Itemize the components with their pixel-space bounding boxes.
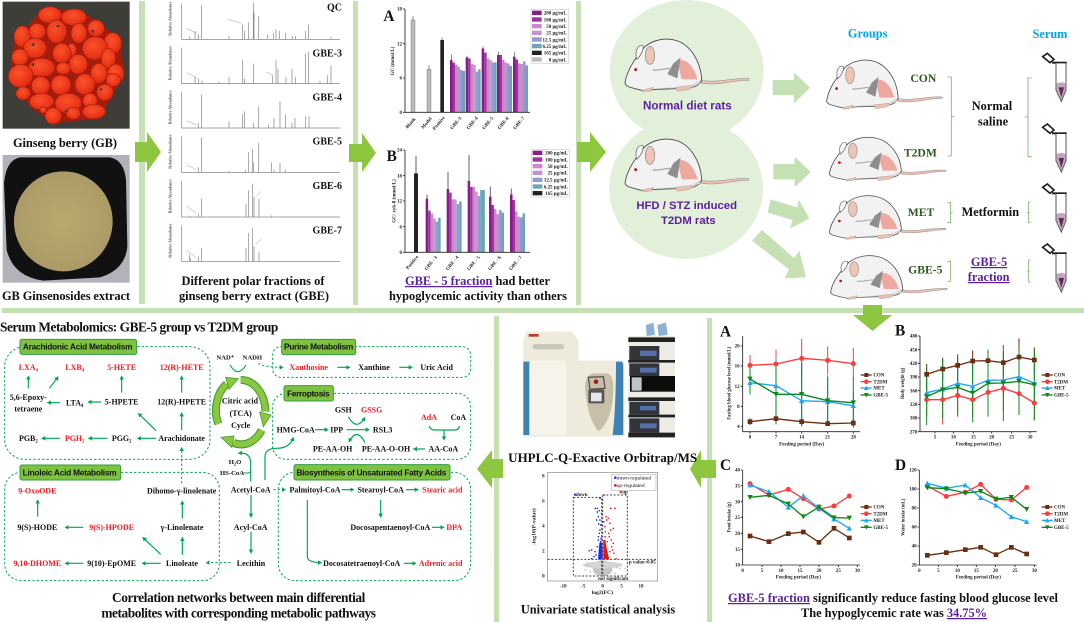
chart B: body weight: 15 [971, 436, 976, 441]
chart A: fasting glucose: Fasting blood glucose level (mmol/L) [728, 346, 733, 420]
chart A: fasting glucose: 14 [799, 436, 805, 441]
group labels: T2DM [904, 146, 937, 159]
panel: bar chart A: 50 μg/mL [546, 25, 567, 30]
panel: bar chart B: 50 μg/mL [548, 165, 569, 170]
pathway: arachidonic acid [5, 339, 210, 459]
treatment labels: GBE-5 [971, 255, 1007, 269]
label: extract: GB Ginsenosides extract [2, 289, 131, 303]
chart D: water intake: 40 [912, 545, 917, 550]
panel: bar chart A: 0 [399, 111, 402, 116]
panel: bar chart B: GC/ xyk-8 (mmol/L) [393, 179, 398, 223]
heading: serum metabolomics: Serum Metabolomics: GBE-5 group vs T2DM group [0, 319, 278, 334]
pathway: arachidonic acid: Arachidonic Acid Metabolism [23, 342, 132, 352]
panel: bar chart A: 6 [399, 77, 402, 82]
pathway: linoleic acid [5, 465, 219, 581]
chart B: body weight: 450 [910, 348, 918, 353]
chromatogram labels [313, 2, 342, 236]
pathway: linoleic acid: γ-Linolenate [160, 523, 204, 532]
chart D: water intake: 0 [918, 569, 921, 574]
NAD/NADH cofactors [216, 354, 283, 372]
chart D: water intake: 25 [1013, 569, 1018, 574]
caption: hypoglycemic rate: GBE-5 fraction significantly reduce fasting blood glucose level [728, 591, 1059, 605]
pathway: fatty acids [278, 465, 471, 581]
pathway: arachidonic acid: 2 [35, 440, 38, 445]
group labels: CON [910, 72, 937, 85]
chart B: body weight: 5 [934, 436, 937, 441]
caption: GBE-5 better activity: GBE - 5 fraction had better [405, 274, 550, 288]
green blob: rat populations [609, 0, 764, 259]
pathway: arachidonic acid: Arachidonate [158, 434, 205, 443]
label: normal diet rats: Normal diet rats [643, 99, 732, 112]
chart B: body weight: 270 [910, 430, 918, 435]
chart A: fasting glucose: 12 [735, 385, 740, 390]
panel: bar chart B: 12 [397, 200, 403, 205]
arrow: animal model to charts [853, 305, 892, 331]
chart D: water intake: GBE-5 [1054, 526, 1069, 531]
chart: volcano plot: down-regulated [617, 475, 651, 481]
pathway: ferroptosis: PE-AA-OH [313, 445, 353, 454]
pathway: arachidonic acid: 4 [81, 404, 84, 409]
pathway: fatty acids: Palmitoyl-CoA [289, 485, 341, 494]
chart C: food intake: 20 [817, 569, 822, 574]
chart: volcano plot: 10 [639, 584, 644, 589]
chromatogram labels: GBE-6 [313, 181, 342, 192]
chart D: water intake: 10 [955, 569, 960, 574]
caption: polar fractions [179, 274, 329, 303]
caption: polar fractions: ginseng berry extract (GBE) [179, 289, 329, 303]
panel: bar chart A [383, 8, 568, 132]
pathway: fatty acids: Docosapentaenoyl-CoA [350, 523, 430, 532]
chromatogram GBE-3: Relative Abundance [167, 46, 172, 80]
chart D: water intake: 5 [937, 569, 940, 574]
pathway: purine: Purine Metabolism [284, 342, 353, 352]
chart A: fasting glucose: 16 [735, 365, 740, 370]
chart: volcano plot: -5 [581, 584, 586, 589]
chart D: water intake: T2DM [1054, 512, 1068, 517]
rat: MET [829, 196, 946, 240]
panel: bar chart A: GBE-6 [497, 116, 511, 131]
pathway: ferroptosis: GSSG [361, 406, 382, 415]
panel: bar chart A: A [383, 8, 394, 25]
chart: volcano plot [530, 473, 658, 596]
label: univariate: Univariate statistical analysis [521, 602, 675, 616]
chart A: fasting glucose: Feeding period (Day) [779, 442, 825, 447]
chart: volcano plot: up-regulated [617, 483, 645, 489]
pathway: ferroptosis: PE-AA-O-OH [362, 445, 411, 454]
pathway: linoleic acid: Linoleate [166, 559, 198, 568]
chart B: body weight: CON [1054, 374, 1065, 379]
panel: bar chart A: 200 μg/mL [544, 12, 567, 17]
caption: correlation networks: metabolites with corresponding metabolic pathways [101, 605, 376, 620]
chart A: fasting glucose: 20 [735, 345, 740, 350]
NAD/NADH cofactors: NAD⁺ [216, 354, 235, 361]
chart C: food intake: 15 [735, 548, 741, 553]
instrument: LC stack [628, 323, 675, 437]
panel: animal model [609, 0, 1068, 300]
panel: bar chart B: 200 μg/mL [545, 152, 569, 157]
chart D: water intake: 100 [909, 488, 917, 493]
chart D: water intake: 120 [909, 469, 917, 474]
label: HFD STZ rats [636, 200, 737, 227]
panel: bar chart A: 12.5 μg/mL [543, 38, 567, 43]
label: ginseng berry: Ginseng berry (GB) [13, 136, 117, 150]
chart B: body weight: B [895, 323, 905, 340]
pathway: arachidonic acid: 4 [82, 369, 85, 374]
chart A: fasting glucose: 28 [851, 436, 856, 441]
pathway: arachidonic acid: 5,6-Epoxy- [10, 393, 47, 402]
chart D: water intake: D [895, 457, 906, 474]
photo: ginsenosides extract powder [3, 155, 130, 283]
chart C: food intake: CON [873, 506, 885, 511]
panel: bar chart B: GBE - 7 [509, 255, 524, 272]
chart: volcano plot: 4 [542, 525, 545, 530]
pathway: arachidonic acid: LXB [65, 363, 82, 372]
panel: UHPLC-MS [508, 323, 697, 616]
chart: volcano plot: -log10(P-value) [530, 508, 537, 545]
panel: bar chart A: 165 μg/mL [544, 52, 567, 57]
pathway: ferroptosis: Ferroptosis [287, 388, 330, 398]
panel: bar chart B: Positive [406, 254, 421, 271]
pathway: linoleic acid: 9(S)-HODE [17, 523, 57, 532]
panel: bar chart A: Blank [405, 117, 417, 130]
chart A: fasting glucose: 8 [737, 405, 740, 410]
arrow: instrument to network [477, 450, 503, 488]
pathway: purine: Xanthosine [289, 363, 328, 372]
chromatogram GBE-5 [167, 134, 340, 172]
pathway: arachidonic acid: PGG [112, 434, 129, 443]
panel: bar chart A: 18 [397, 8, 403, 13]
chart C: food intake: GBE-5 [873, 526, 889, 531]
chart D: water intake: Feeding period (Day) [956, 576, 1001, 581]
brackets [947, 77, 1032, 282]
pathway: linoleic acid: Dihomo-γ-linolenate [147, 486, 217, 495]
chart C: food intake: 35 [735, 484, 741, 489]
chart C: food intake: Feeding period (Day) [776, 576, 821, 581]
chart B: body weight: 10 [951, 436, 956, 441]
chromatogram GBE-5: Relative Abundance [167, 134, 172, 169]
pathway: arachidonic acid: 5-HPETE [105, 398, 139, 407]
chart C: food intake: MET [873, 519, 885, 524]
chart: volcano plot: 0 [601, 584, 604, 589]
chart D: water intake: 30 [1032, 569, 1037, 574]
rat: T2DM [829, 137, 946, 181]
chromatogram labels: GBE-5 [313, 136, 342, 148]
pathway: fatty acids: Adrenic acid [419, 559, 463, 568]
pathway: arachidonic acid: LXA [19, 363, 36, 372]
chart C: food intake: 20 [735, 532, 741, 537]
pathway: linoleic acid: Linoleic Acid Metabolism [23, 467, 117, 477]
TCA cycle: Cycle [231, 421, 251, 430]
pathway: arachidonic acid: 5-HETE [107, 363, 136, 372]
heading: groups: Groups [848, 27, 888, 41]
chromatogram GBE-7: Relative Abundance [167, 223, 172, 258]
panel: bar chart A: 100 μg/mL [544, 18, 567, 23]
arrow: bar charts to animal model [577, 132, 606, 172]
caption: hypoglycemic rate [728, 591, 1059, 620]
pathway: ferroptosis: RSL3 [373, 425, 392, 434]
panel: bar chart B: 0 [399, 251, 402, 256]
panel: bar chart A: GC (mmol/L) [391, 46, 396, 75]
pathway: linoleic acid: 9-OxoODE [18, 486, 56, 495]
pathway: arachidonic acid: 4 [36, 369, 39, 374]
central acetyl-CoA chain [206, 437, 293, 568]
central acetyl-CoA chain: H [229, 459, 234, 466]
panel: bar chart B: 24 [397, 149, 403, 154]
chromatogram GBE-3 [167, 46, 340, 84]
rat: GBE-5 [831, 256, 948, 300]
pathway: fatty acids: Stearic acid [422, 485, 463, 494]
rat: CON [827, 60, 943, 109]
panel: chromatograms [167, 1, 340, 261]
chart B: body weight: 20 [989, 436, 995, 441]
chart B: body weight: 330 [910, 403, 918, 408]
chart A: fasting glucose: GBE-5 [873, 394, 889, 399]
photo: ginseng berries [3, 2, 130, 129]
chromatogram QC [167, 1, 340, 39]
central acetyl-CoA chain: Acetyl-CoA [231, 485, 271, 494]
chart D: water intake [895, 457, 1069, 581]
panel: bar chart B: GBE - 4 [446, 255, 461, 272]
chart B: body weight: 25 [1009, 436, 1015, 441]
arrow: extract to fractions [135, 132, 161, 172]
label: UHPLC: UHPLC-Q-Exactive Orbitrap/MS [508, 450, 697, 465]
treatment labels: saline [978, 114, 1009, 128]
chart: volcano plot: 6 [542, 500, 545, 505]
chromatogram labels: GBE-7 [313, 226, 342, 236]
chart D: water intake: MET [1054, 519, 1066, 524]
chart: volcano plot: -10 [560, 584, 567, 589]
chart B: body weight: Feeding period (Day) [956, 442, 1001, 447]
treatment labels: fraction [968, 270, 1010, 284]
chart C: food intake: C [720, 457, 731, 474]
chart B: body weight: Body weight (g) [901, 367, 906, 399]
pathway: arachidonic acid: tetraene [14, 405, 43, 414]
panel: bar chart B: 6.25 μg/mL [544, 185, 569, 190]
label: HFD STZ rats: HFD / STZ induced [636, 200, 737, 212]
pathway: ferroptosis [273, 386, 471, 459]
pathway: linoleic acid: 9(10)-EpOME [87, 559, 136, 568]
caption: correlation networks: Correlation networks between main differential [112, 590, 366, 605]
tubes: serum samples [1043, 53, 1067, 292]
arrow: charts to instrument [690, 450, 716, 488]
chart: volcano plot: log2(FC) [592, 589, 613, 596]
panel: bar chart A: GBE-4 [466, 116, 480, 131]
chart: volcano plot: 2 [542, 549, 545, 554]
TCA cycle: Citric acid [222, 397, 259, 406]
rat: normal diet [625, 39, 749, 92]
caption: GBE-5 better activity: hypoglycemic activity than others [389, 289, 567, 303]
pathway: ferroptosis: GSH [335, 406, 353, 415]
group labels: GBE-5 [908, 263, 943, 276]
chart A: fasting glucose: 0 [749, 436, 752, 441]
panel: bar chart A: 0 μg/mL [549, 58, 567, 63]
pathway: fatty acids: DPA [446, 523, 462, 532]
chart: volcano plot: p value=0.05 [629, 560, 656, 565]
rat: HFD/STZ [625, 139, 749, 192]
chromatogram QC: Relative Abundance [167, 1, 172, 36]
chart C: food intake: 15 [798, 569, 803, 574]
NAD/NADH cofactors: NADH [243, 354, 263, 361]
chart C: food intake: 30 [735, 500, 741, 505]
pathway: fatty acids: Docosatetraenoyl-CoA [323, 559, 400, 568]
chart B: body weight: MET [1054, 387, 1066, 392]
chart C: food intake: 10 [735, 564, 741, 569]
caption: hypoglycemic rate: The hypoglycemic rate was 34.75% [801, 606, 987, 620]
panel: line charts [720, 323, 1069, 581]
chart C: food intake: 40 [735, 469, 741, 474]
chart C: food intake: 25 [735, 516, 741, 521]
chart B: body weight: 300 [910, 417, 918, 422]
treatment labels: Metformin [962, 205, 1019, 219]
chromatogram GBE-6 [167, 179, 340, 217]
chart: volcano plot: 5 [620, 584, 623, 589]
panel: bar chart B: 12.5 μg/mL [544, 179, 569, 184]
chromatogram GBE-4 [167, 90, 340, 128]
pathway: purine [273, 339, 471, 377]
panel: bar chart A: GBE-3 [450, 116, 464, 131]
arrow: fractions to bar charts [349, 133, 376, 172]
central acetyl-CoA chain: Lecithin [237, 559, 266, 568]
chart A: fasting glucose [720, 324, 889, 447]
central acetyl-CoA chain: 2 [234, 461, 236, 466]
panel: metabolic network [0, 319, 471, 620]
chart A: fasting glucose: 7 [775, 436, 778, 441]
chart B: body weight [895, 323, 1069, 447]
chromatogram labels: GBE-3 [313, 48, 342, 60]
pathway: ferroptosis: CoA [451, 413, 466, 422]
panel: bar chart A: 6.25 μg/mL [543, 45, 567, 50]
chart B: body weight: 390 [910, 376, 918, 381]
chromatogram GBE-4: Relative Abundance [167, 90, 172, 124]
chart A: fasting glucose: A [720, 324, 731, 341]
chart B: body weight: 30 [1028, 436, 1033, 441]
panel: bar chart B: 18 [397, 174, 403, 179]
chart: volcano plot: not significant [598, 577, 629, 582]
panel: bar chart A: Positive [432, 115, 447, 132]
heading: serum: Serum [1033, 27, 1068, 41]
chart D: water intake: Water intake (mL) [902, 498, 907, 536]
central acetyl-CoA chain: O [236, 459, 241, 466]
dashed link: dihomo to arachidonate [180, 447, 183, 483]
group labels [904, 72, 943, 276]
chart B: body weight: GBE-5 [1054, 394, 1069, 399]
panel: bar chart A: 12 [397, 42, 403, 47]
chart D: water intake: 60 [912, 526, 917, 531]
central acetyl-CoA chain: Acyl-CoA [234, 523, 268, 532]
pathway: ferroptosis: AdA [421, 413, 437, 422]
panel: bar chart A: Model [421, 116, 434, 130]
chart A: fasting glucose: 21 [825, 436, 831, 441]
pathway: arachidonic acid: PGH [65, 434, 82, 443]
panel: bar chart B: GBE - 6 [488, 255, 503, 272]
chart B: body weight: 420 [910, 362, 918, 367]
chart: volcano plot: up [622, 490, 628, 495]
pathway: arachidonic acid: 2 [129, 440, 132, 445]
treatment labels: Normal [972, 99, 1013, 113]
central acetyl-CoA chain: HS-CoA [220, 470, 244, 477]
chart C: food intake: 5 [761, 569, 764, 574]
pathway: arachidonic acid: 12(R)-HPETE [157, 398, 206, 407]
chart D: water intake: CON [1054, 506, 1065, 511]
chart A: fasting glucose: MET [873, 387, 885, 392]
pathway: arachidonic acid: PGB [19, 434, 35, 443]
chart A: fasting glucose: 4 [737, 425, 740, 430]
pathway: ferroptosis: HMG-CoA [277, 425, 315, 434]
pathway: linoleic acid: 9,10-DHOME [13, 559, 61, 568]
chromatogram labels: GBE-4 [313, 92, 342, 104]
chart C: food intake: T2DM [873, 512, 888, 517]
chart: volcano plot: 8 [542, 475, 545, 480]
chart B: body weight: 480 [910, 335, 918, 340]
pathway: ferroptosis: AA-CoA [428, 445, 458, 454]
chromatogram GBE-6: Relative Abundance [167, 179, 172, 213]
chart D: water intake: 20 [993, 569, 998, 574]
chromatogram labels: QC [327, 2, 342, 14]
pathway: ferroptosis: IPP [330, 425, 343, 434]
panel: bar chart A: GBE-7 [513, 116, 527, 131]
pathway: fatty acids: Stearoyl-CoA [357, 485, 404, 494]
pathway: linoleic acid: 9(S)-HPODE [89, 523, 134, 532]
TCA cycle [216, 377, 271, 447]
panel: bar chart A: 25 μg/mL [546, 32, 567, 37]
chart C: food intake: 10 [779, 569, 784, 574]
panel: bar chart B: GBE - 3 [424, 255, 439, 272]
pathway: arachidonic acid: LTA [66, 398, 81, 407]
panel: bar chart B: GBE - 5 [467, 255, 482, 272]
pathway: purine: Xanthine [358, 363, 390, 372]
caption: polar fractions: Different polar fractions of [182, 274, 325, 288]
panel: bar chart B: B [387, 148, 397, 165]
panel: bar chart B: 25 μg/mL [548, 172, 569, 177]
chromatogram GBE-7 [167, 223, 340, 261]
panel: bar chart A: GBE-5 [482, 116, 496, 131]
pathway: arachidonic acid: 12(R)-HETE [160, 363, 204, 372]
caption: correlation networks [101, 590, 376, 620]
chart B: body weight: T2DM [1054, 380, 1068, 385]
pathway: fatty acids: Biosynthesis of Unsaturated Fatty Acids [296, 467, 447, 477]
label: HFD STZ rats: T2DM rats [661, 215, 716, 227]
chart C: food intake: 0 [741, 569, 744, 574]
chart C: food intake: 30 [855, 569, 860, 574]
chart B: body weight: 360 [910, 389, 918, 394]
TCA cycle: (TCA) [230, 409, 252, 418]
group labels: MET [908, 206, 934, 219]
treatment labels [962, 99, 1019, 284]
instrument: mass spectrometer [523, 332, 623, 437]
panel: bar chart B [387, 148, 569, 272]
chart D: water intake: 80 [912, 507, 917, 512]
chart C: food intake: Food intake (g) [728, 502, 733, 532]
chart: volcano plot: 0 [542, 574, 545, 579]
chart D: water intake: 15 [974, 569, 979, 574]
pathway: arachidonic acid: 2 [82, 440, 85, 445]
chart C: food intake [720, 457, 889, 581]
panel: bar chart B: 165 μg/mL [545, 192, 569, 197]
panel: bar chart B: 6 [399, 225, 402, 230]
caption: GBE-5 better activity [389, 274, 567, 303]
chart A: fasting glucose: T2DM [873, 380, 888, 385]
chart D: water intake: 20 [912, 564, 917, 569]
chart: volcano plot: down [576, 493, 588, 498]
arrows: to groups [752, 72, 811, 278]
chart A: fasting glucose: CON [873, 374, 885, 379]
chart C: food intake: 25 [836, 569, 841, 574]
panel: bar chart B: 100 μg/mL [545, 158, 569, 163]
pathway: purine: Uric Acid [420, 363, 454, 372]
